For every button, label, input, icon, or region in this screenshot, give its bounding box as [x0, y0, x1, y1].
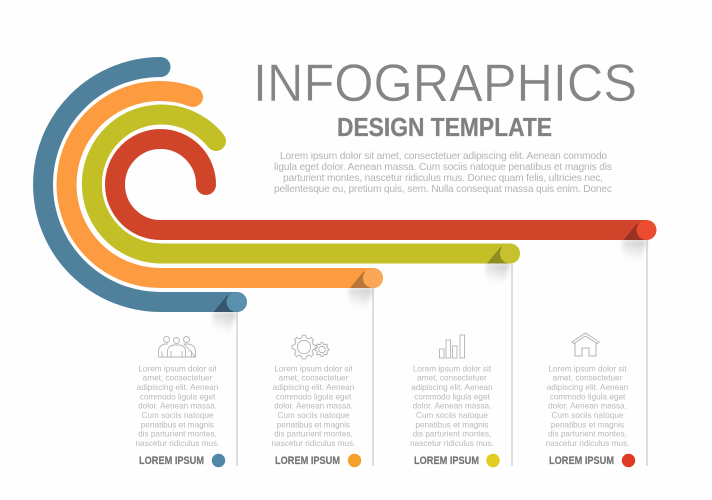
column 1 text: commodo ligula eget	[140, 392, 216, 401]
column 2 text: penatibus et magnis	[277, 420, 350, 429]
intro text: ligula eget dolor. Aenean massa. Cum sociis natoque penatibus et magnis dis	[274, 162, 612, 173]
column 4 text: penatibus et magnis	[551, 420, 624, 429]
column 4 text	[546, 364, 629, 448]
vertical leader lines	[237, 240, 647, 466]
icon: gears	[292, 335, 329, 359]
column 1 text: Cum sociis natoque	[142, 411, 214, 420]
olive ribbon	[92, 115, 510, 254]
column 2 text: amet, consectetuer	[279, 374, 349, 383]
column 3 text: penatibus et magnis	[415, 420, 489, 429]
column 2 text: dis parturient montes,	[274, 430, 353, 439]
column 2 label: LOREM IPSUM	[275, 455, 340, 467]
column 1 text: nascetur ridiculus mus.	[136, 439, 219, 448]
column 1 text: amet, consectetuer	[143, 374, 213, 383]
column 3 text: Cum sociis natoque	[416, 411, 488, 420]
red ribbon end cap	[622, 220, 656, 260]
column 3 text: commodo ligula eget	[414, 392, 490, 401]
intro text: pellentesque eu, pretium quis, sem. Nulla consequat massa quis enim. Donec	[274, 184, 612, 195]
column 4 text: adipiscing elit. Aenean	[547, 383, 629, 392]
column 2 text: commodo ligula eget	[276, 392, 352, 401]
column 2 text: Lorem ipsum dolor sit	[274, 364, 353, 373]
column 1 text: penatibus et magnis	[141, 420, 214, 429]
column 1 text: dis parturient montes,	[138, 430, 217, 439]
red ribbon	[115, 139, 646, 230]
column 4 text: Cum sociis natoque	[552, 411, 624, 420]
column 4 text: amet, consectetuer	[553, 374, 623, 383]
column 3 dot	[486, 454, 500, 467]
column 3 text: Lorem ipsum dolor sit	[413, 364, 492, 373]
column 1 text: Lorem ipsum dolor sit	[138, 364, 217, 373]
icon: people	[158, 336, 196, 357]
column 4 text: dolor. Aenean massa.	[548, 402, 627, 411]
column 2 text: Cum sociis natoque	[278, 411, 350, 420]
column 1 dot	[212, 454, 225, 467]
orange ribbon end cap	[349, 268, 383, 308]
orange ribbon	[67, 91, 373, 278]
column 1 label: LOREM IPSUM	[139, 455, 204, 467]
column 4 text: dis parturient montes,	[548, 430, 627, 439]
icon: house	[572, 333, 599, 356]
column 2 text: adipiscing elit. Aenean	[273, 383, 355, 392]
title: INFOGRAPHICS	[253, 54, 637, 113]
column 2 text: nascetur ridiculus mus.	[272, 439, 355, 448]
column 4 text: nascetur ridiculus mus.	[546, 439, 629, 448]
intro text: Lorem ipsum dolor sit amet, consectetuer adipiscing elit. Aenean commodo	[280, 151, 607, 162]
column 3 text: nascetur ridiculus mus.	[410, 439, 494, 448]
column 4 dot	[622, 454, 635, 467]
column 3 text: amet, consectetuer	[417, 374, 487, 383]
column 4 text: Lorem ipsum dolor sit	[548, 364, 627, 373]
column 2 dot	[348, 454, 361, 467]
column 4 text: commodo ligula eget	[550, 392, 626, 401]
column 3 text	[410, 364, 494, 448]
column 1 text: adipiscing elit. Aenean	[137, 383, 219, 392]
icon: bar chart	[440, 335, 464, 358]
column 1 text	[136, 364, 219, 448]
column 3 label: LOREM IPSUM	[414, 455, 479, 467]
column 3 text: dis parturient montes,	[413, 430, 491, 439]
blue ribbon end cap	[212, 292, 246, 332]
column 2 text	[272, 364, 355, 448]
column 4 label: LOREM IPSUM	[549, 455, 614, 467]
subtitle: DESIGN TEMPLATE	[337, 114, 552, 142]
column 3 text: dolor. Aenean massa.	[413, 402, 491, 411]
olive ribbon end cap	[486, 244, 520, 284]
column 2 text: dolor. Aenean massa.	[274, 402, 353, 411]
column 3 text: adipiscing elit. Aenean	[411, 383, 493, 392]
intro text	[274, 151, 612, 195]
column 1 text: dolor. Aenean massa.	[138, 402, 217, 411]
intro text: parturient montes, nascetur ridiculus mus. Donec quam felis, ultricies nec,	[283, 173, 603, 184]
blue ribbon	[43, 67, 237, 302]
